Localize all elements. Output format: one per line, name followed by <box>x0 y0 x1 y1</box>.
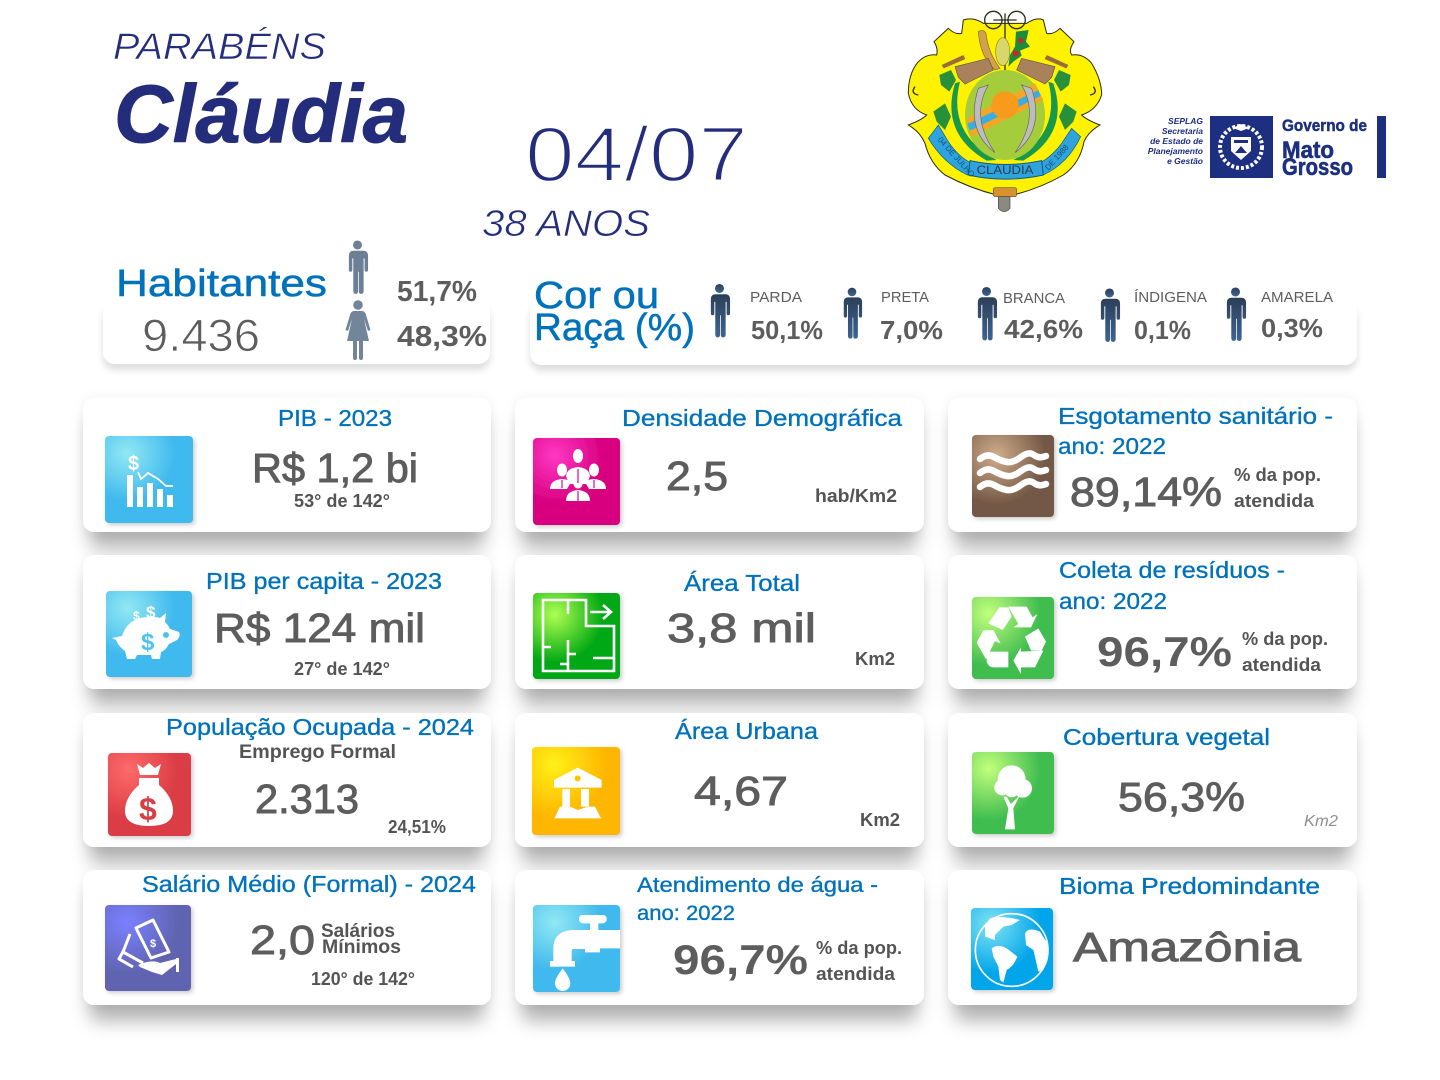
icon: money bag <box>108 753 191 836</box>
item: preta: 7,0% <box>880 315 943 345</box>
heading: habitantes: Habitantes <box>116 263 327 305</box>
item: amarela <box>1227 287 1333 343</box>
card: salário médio <box>83 870 491 1005</box>
panel: cor ou raça <box>530 275 1357 365</box>
card: salário médio: 2,0 <box>250 917 315 963</box>
SEPLAG text: SEPLAG <box>1168 116 1203 126</box>
icon: piggy bank: $ <box>146 603 156 622</box>
item: indígena: ÍNDIGENA <box>1134 289 1207 306</box>
card: população ocupada: 24,51% <box>388 817 446 837</box>
card: coleta de resíduos <box>948 555 1357 689</box>
card: atendimento de água: Atendimento de água - <box>637 874 878 897</box>
card: bioma predominante: Amazônia <box>1073 924 1301 970</box>
card: esgotamento sanitário <box>948 398 1357 532</box>
value: male share: 51,7% <box>397 276 477 308</box>
card: área total: Km2 <box>855 649 895 669</box>
card: coleta de resíduos: atendida <box>1242 655 1322 675</box>
item: branca: BRANCA <box>1003 291 1065 307</box>
item: parda <box>711 284 823 345</box>
card: população ocupada: 2.313 <box>255 776 359 822</box>
card: densidade demográfica: Densidade Demográfica <box>622 405 902 431</box>
icon: globe <box>971 908 1053 990</box>
item: parda: 50,1% <box>751 315 823 345</box>
card: atendimento de água: % da pop. <box>816 938 902 958</box>
card: densidade demográfica <box>515 398 924 532</box>
card: PIB per capita: PIB per capita - 2023 <box>206 568 442 594</box>
card: população ocupada: População Ocupada - 2024 <box>166 714 474 740</box>
item: amarela: AMARELA <box>1261 290 1333 306</box>
card: cobertura vegetal: Km2 <box>1304 813 1338 830</box>
card: PIB <box>83 398 491 532</box>
title: Cláudia: Cláudia <box>114 69 408 160</box>
icon: tree <box>972 752 1054 834</box>
card: coleta de resíduos: Coleta de resíduos - <box>1059 557 1285 583</box>
icon: chart <box>105 436 193 523</box>
card: cobertura vegetal <box>948 713 1357 847</box>
card: PIB: PIB - 2023 <box>278 405 392 431</box>
card: cobertura vegetal: Cobertura vegetal <box>1063 724 1270 750</box>
card: área total: Área Total <box>684 570 800 596</box>
heading: cor ou raça <box>534 275 695 349</box>
card: esgotamento sanitário: 89,14% <box>1070 469 1222 515</box>
card: esgotamento sanitário: Esgotamento sanitário - <box>1058 403 1333 429</box>
item: indígena: 0,1% <box>1134 315 1191 345</box>
item: branca: 42,6% <box>1004 314 1083 344</box>
SEPLAG text: Planejamento <box>1148 146 1203 156</box>
panel: habitantes <box>103 240 490 364</box>
icon: piggy bank <box>106 591 192 677</box>
icon: recycling <box>972 597 1054 679</box>
card: coleta de resíduos: ano: 2022 <box>1059 588 1167 614</box>
icon: municipal coat of arms: CLAUDIA <box>977 163 1033 177</box>
icon: waves <box>972 435 1054 517</box>
item: amarela: 0,3% <box>1261 313 1323 343</box>
card: área urbana: 4,67 <box>694 768 788 814</box>
icon: woman <box>346 300 370 360</box>
card: densidade demográfica: hab/Km2 <box>815 486 897 506</box>
card: área total <box>515 555 924 689</box>
icon: money bag: $ <box>139 791 157 827</box>
value: female share: 48,3% <box>397 321 487 353</box>
card: cobertura vegetal: 56,3% <box>1118 774 1245 820</box>
item: indígena <box>1101 288 1207 345</box>
icon: money in hand <box>105 905 191 991</box>
logo: Governo de Mato Grosso: Mato <box>1282 137 1334 164</box>
icon: floor plan <box>533 593 620 679</box>
heading: cor ou raça: Cor ou <box>534 275 659 317</box>
value: population: 9.436 <box>142 310 260 361</box>
icon: piggy bank: $ <box>133 609 140 623</box>
card: PIB per capita <box>83 555 491 689</box>
icon: municipal coat of arms <box>908 11 1102 212</box>
icon: group of people <box>533 438 620 525</box>
heading: cor ou raça: Raça (%) <box>534 307 695 349</box>
logo: Governo de Mato Grosso: Governo de <box>1282 116 1367 135</box>
SEPLAG text <box>1148 116 1203 166</box>
card: PIB: R$ 1,2 bi <box>252 445 418 491</box>
card: densidade demográfica: 2,5 <box>666 453 728 499</box>
card: salário médio: Salário Médio (Formal) - 2024 <box>142 871 476 897</box>
item: branca <box>978 287 1083 344</box>
card: salário médio: Mínimos <box>322 937 401 958</box>
title: parabéns: PARABÉNS <box>113 26 326 67</box>
icon: water tap <box>533 905 620 992</box>
icon: man <box>349 240 368 294</box>
card: coleta de resíduos: % da pop. <box>1242 629 1328 649</box>
icon: municipal coat of arms: 04 DE JULHO <box>936 135 976 179</box>
icon: municipal coat of arms: DE 1988 <box>1043 142 1071 172</box>
card: atendimento de água: 96,7% <box>673 936 808 983</box>
card: PIB per capita: 27° de 142° <box>294 659 390 679</box>
card: esgotamento sanitário: ano: 2022 <box>1058 433 1166 459</box>
age: 38 ANOS <box>482 203 650 244</box>
card: área urbana: Km2 <box>860 810 900 830</box>
date: 04/07 <box>525 110 748 198</box>
item: parda: PARDA <box>750 290 802 306</box>
card: coleta de resíduos: 96,7% <box>1097 628 1232 675</box>
card: salário médio: 120° de 142° <box>311 969 415 989</box>
icon: chart: $ <box>128 453 139 475</box>
card: esgotamento sanitário: atendida <box>1234 491 1315 511</box>
card: atendimento de água: atendida <box>816 964 896 984</box>
card: área urbana: Área Urbana <box>675 718 818 744</box>
icon: money in hand: $ <box>150 938 156 950</box>
card: população ocupada <box>83 713 491 847</box>
card: PIB: 53° de 142° <box>294 491 390 511</box>
icon: bank building <box>532 747 620 835</box>
card: bioma predominante <box>948 870 1357 1005</box>
card: atendimento de água <box>515 870 924 1005</box>
item: preta <box>844 288 943 345</box>
item: preta: PRETA <box>881 290 929 306</box>
logo: Governo de Mato Grosso <box>1148 116 1386 181</box>
card: área urbana <box>515 713 924 847</box>
logo: Governo de Mato Grosso: Grosso <box>1282 154 1353 181</box>
card: atendimento de água: ano: 2022 <box>637 902 735 925</box>
SEPLAG text: e Gestão <box>1167 156 1203 166</box>
card: bioma predominante: Bioma Predomindante <box>1059 873 1320 899</box>
card: salário médio: Salários <box>321 921 395 942</box>
card: esgotamento sanitário: % da pop. <box>1234 465 1321 485</box>
card: população ocupada: Emprego Formal <box>239 742 396 763</box>
card: PIB per capita: R$ 124 mil <box>214 605 425 651</box>
SEPLAG text: de Estado de <box>1150 136 1203 146</box>
icon: piggy bank: $ <box>141 629 155 656</box>
card: área total: 3,8 mil <box>667 605 816 651</box>
SEPLAG text: Secretaria <box>1162 126 1203 136</box>
